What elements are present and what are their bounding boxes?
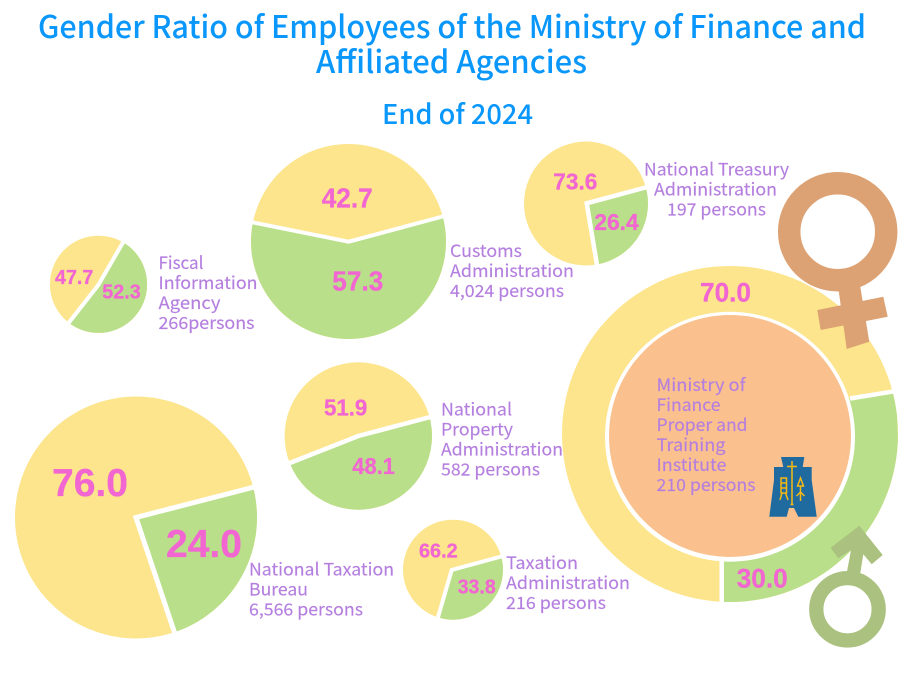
label: National Property Administration: Administration bbox=[441, 436, 563, 460]
label: Fiscal Information Agency: 266persons bbox=[158, 309, 255, 334]
label: National Taxation Bureau: Bureau bbox=[249, 576, 308, 600]
icon: female symbol bbox=[789, 183, 888, 349]
label: National Treasury Administration bbox=[644, 156, 789, 220]
title bbox=[38, 2, 866, 82]
label: National Property Administration: Property bbox=[441, 416, 513, 440]
pie: National Treasury Administration: 73.6 bbox=[553, 168, 597, 194]
label: Fiscal Information Agency: Information bbox=[158, 269, 258, 294]
label: Fiscal Information Agency: Agency bbox=[158, 289, 221, 314]
label: National Treasury Administration: Administration bbox=[654, 176, 777, 200]
pie: National Property Administration: 48.1 bbox=[352, 453, 395, 479]
label: Customs Administration: Customs bbox=[450, 237, 522, 262]
label: Ministry of Finance Proper and Training Institute: Ministry of bbox=[656, 371, 747, 396]
pie: Customs Administration: 42.7 bbox=[322, 182, 373, 214]
pie: Fiscal Information Agency bbox=[50, 236, 148, 333]
label: National Property Administration: 582 persons bbox=[441, 456, 540, 480]
label: Fiscal Information Agency bbox=[158, 249, 258, 334]
donut: Ministry of Finance Proper and Training Institute: 70.0 bbox=[700, 278, 751, 308]
pie: Customs Administration bbox=[251, 144, 446, 339]
label: Customs Administration bbox=[450, 237, 574, 302]
donut: Ministry of Finance Proper and Training Institute: 30.0 bbox=[737, 564, 788, 594]
pie: National Taxation Bureau: 76.0 bbox=[52, 462, 128, 505]
title: Gender Ratio of Employees of the Ministry of Finance and bbox=[38, 2, 866, 47]
pie: Taxation Administration: 66.2 bbox=[419, 539, 458, 562]
label: Customs Administration: 4,024 persons bbox=[450, 277, 564, 302]
label: National Property Administration: National bbox=[441, 396, 512, 420]
label: Ministry of Finance Proper and Training Institute: Finance bbox=[656, 391, 720, 416]
pie: Customs Administration: 57.3 bbox=[332, 266, 383, 296]
pie: Taxation Administration: 33.8 bbox=[458, 575, 496, 598]
icon: male symbol bbox=[816, 526, 883, 640]
label: Taxation Administration: Taxation bbox=[506, 549, 578, 574]
title: Affiliated Agencies bbox=[316, 37, 587, 82]
label: Ministry of Finance Proper and Training Institute: Institute bbox=[656, 451, 726, 476]
label: Taxation Administration: Administration bbox=[506, 569, 630, 594]
pie: National Property Administration: 51.9 bbox=[324, 394, 367, 420]
label: Ministry of Finance Proper and Training Institute: Proper and bbox=[656, 411, 748, 436]
pie: National Treasury Administration bbox=[524, 142, 648, 266]
label: Taxation Administration: 216 persons bbox=[506, 589, 606, 614]
label: National Taxation Bureau bbox=[249, 556, 394, 620]
pie: Fiscal Information Agency: 47.7 bbox=[55, 266, 93, 289]
pie: National Property Administration bbox=[285, 362, 440, 515]
label: National Property Administration bbox=[441, 396, 563, 480]
pie: Fiscal Information Agency: 52.3 bbox=[102, 280, 141, 303]
label: Ministry of Finance Proper and Training Institute: Training bbox=[656, 431, 726, 456]
label: Fiscal Information Agency: Fiscal bbox=[158, 249, 204, 274]
donut: Ministry of Finance Proper and Training Institute bbox=[562, 266, 905, 610]
label: Ministry of Finance Proper and Training Institute bbox=[656, 371, 756, 496]
subtitle: year: End of 2024 bbox=[382, 93, 533, 132]
pie: National Taxation Bureau bbox=[15, 396, 262, 640]
label: National Treasury Administration: National Treasury bbox=[644, 156, 789, 180]
label: National Treasury Administration: 197 persons bbox=[667, 196, 766, 220]
label: Ministry of Finance Proper and Training Institute: 210 persons bbox=[656, 471, 756, 496]
label: Customs Administration: Administration bbox=[450, 257, 574, 282]
label: National Taxation Bureau: National Taxation bbox=[249, 556, 394, 580]
pie: Taxation Administration bbox=[403, 520, 503, 620]
pie: National Treasury Administration: 26.4 bbox=[594, 209, 639, 235]
label: Taxation Administration bbox=[506, 549, 630, 614]
icon: ministry logo bbox=[769, 457, 817, 517]
label: National Taxation Bureau: 6,566 persons bbox=[249, 596, 363, 620]
pie: National Taxation Bureau: 24.0 bbox=[166, 523, 242, 566]
